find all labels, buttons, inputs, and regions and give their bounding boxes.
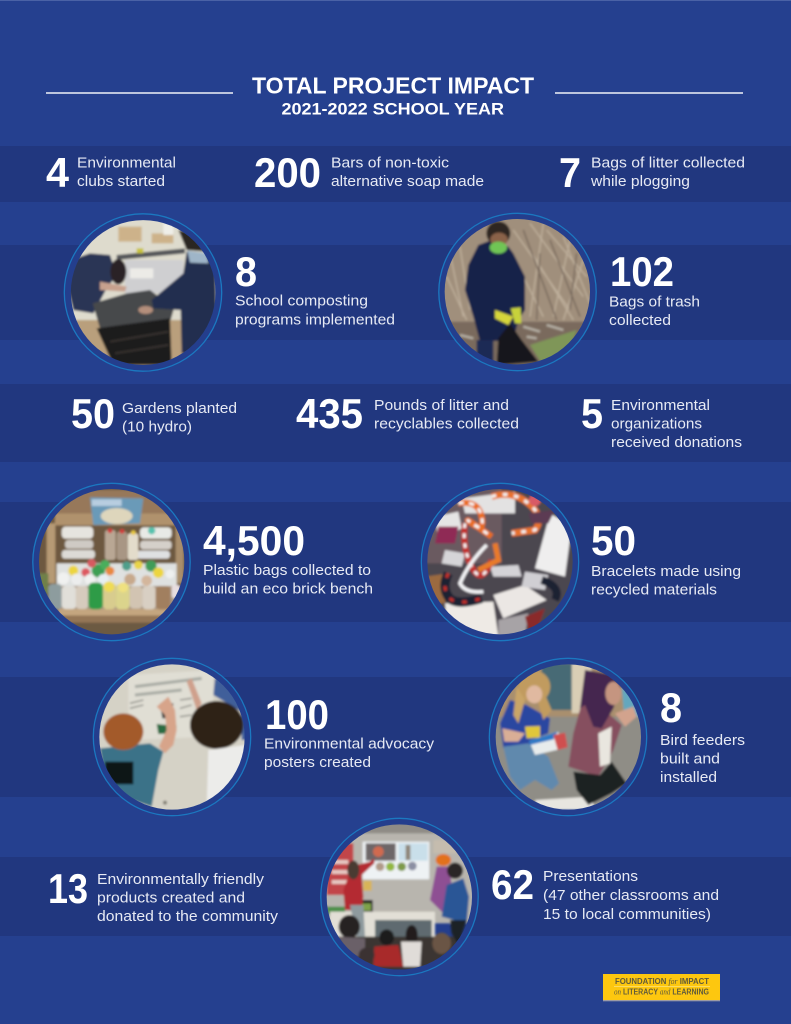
stat: 435 pounds of litter: 435 <box>296 390 363 437</box>
stat: 4,500 plastic bags: Plastic bags collected to <box>203 562 371 579</box>
stat: 7 bags of litter: 7 <box>559 149 581 196</box>
photo: eco brick bench <box>33 483 192 641</box>
stat: 50 gardens: (10 hydro) <box>122 418 192 436</box>
stat: 8 bird feeders <box>660 684 745 786</box>
stat: 4,500 plastic bags: 4,500 <box>203 517 305 564</box>
stat: 100 posters: 100 <box>265 691 329 738</box>
stat: 5 organizations: 5 <box>581 390 603 437</box>
stat: 13 products <box>48 865 279 925</box>
stat: 5 organizations <box>581 390 742 451</box>
logo: Foundation for Impact on Literacy and Learning <box>603 974 720 1001</box>
photo: students writing advocacy poster <box>93 658 252 816</box>
stat: 100 posters: Environmental advocacy <box>264 736 435 752</box>
title block <box>46 72 743 118</box>
stat: 7 bags of litter: Bags of litter collected <box>591 155 745 172</box>
photo: students building bird feeders <box>489 658 648 816</box>
stat: 13 products: Environmentally friendly <box>97 871 265 888</box>
stat: 62 presentations <box>491 861 719 923</box>
stat: 200 bars of soap: 200 <box>254 149 321 196</box>
stat: 50 bracelets <box>591 517 741 598</box>
stat: 62 presentations: 15 to local communities) <box>543 906 711 923</box>
stat: 13 products: products created and <box>97 890 245 906</box>
stat: 200 bars of soap <box>254 149 484 196</box>
stat: 5 organizations: Environmental <box>611 397 710 414</box>
band: row 2 <box>0 245 791 340</box>
stat: 435 pounds of litter: recyclables collected <box>374 416 519 432</box>
stat: 102 bags of trash: collected <box>609 312 671 329</box>
stat: 100 posters <box>264 691 435 771</box>
stat: 4,500 plastic bags: build an eco brick bench <box>203 580 373 598</box>
heading: TOTAL PROJECT IMPACT <box>252 72 535 98</box>
stat: 7 bags of litter <box>559 149 745 196</box>
stat: 102 bags of trash: Bags of trash <box>609 294 700 310</box>
band: row 1 <box>0 146 791 202</box>
stat: 5 organizations: received donations <box>611 434 742 451</box>
stat: 4 environmental clubs: Environmental <box>77 155 176 172</box>
band: row 3 <box>0 384 791 462</box>
photo: student collecting trash <box>439 213 597 372</box>
stat: 100 posters: posters created <box>264 754 371 771</box>
stat: 62 presentations: 62 <box>491 861 534 908</box>
stat: 4,500 plastic bags <box>203 517 373 598</box>
stat: 8 bird feeders: installed <box>660 769 717 786</box>
stat: 8 composting programs <box>235 248 395 328</box>
stat: 50 bracelets: recycled materials <box>591 582 717 598</box>
stat: 200 bars of soap: alternative soap made <box>331 173 484 190</box>
stat: 8 bird feeders: Bird feeders <box>660 732 745 749</box>
stat: 4 environmental clubs <box>46 149 176 196</box>
stat: 4 environmental clubs: clubs started <box>77 173 165 190</box>
band: row 6 <box>0 857 791 936</box>
stat: 62 presentations: Presentations <box>543 868 638 885</box>
band: row 5 <box>0 677 791 797</box>
stat: 50 gardens: Gardens planted <box>122 400 237 417</box>
stat: 102 bags of trash: 102 <box>610 248 674 295</box>
stat: 50 gardens: 50 <box>71 390 115 437</box>
stat: 8 composting programs: School composting <box>235 293 368 310</box>
stat: 50 gardens <box>71 390 237 437</box>
photo: students at compost bin <box>64 214 222 371</box>
stat: 8 composting programs: 8 <box>235 248 257 295</box>
stat: 7 bags of litter: while plogging <box>590 173 690 190</box>
stat: 200 bars of soap: Bars of non-toxic <box>331 155 450 172</box>
stat: 435 pounds of litter: Pounds of litter and <box>374 397 509 414</box>
logo: Foundation for Impact on Literacy and Learning: FOUNDATION for IMPACT <box>615 977 709 986</box>
stat: 5 organizations: organizations <box>611 416 702 432</box>
stat: 435 pounds of litter <box>296 390 519 437</box>
stat: 50 bracelets: Bracelets made using <box>591 563 741 580</box>
stat: 4 environmental clubs: 4 <box>46 149 70 196</box>
subheading: 2021-2022 SCHOOL YEAR <box>282 99 504 118</box>
stat: 13 products: donated to the community <box>97 908 279 925</box>
stat: 8 bird feeders: built and <box>660 750 720 768</box>
stat: 8 bird feeders: 8 <box>660 684 682 731</box>
band: row 4 <box>0 502 791 622</box>
stat: 102 bags of trash <box>609 248 700 329</box>
logo: Foundation for Impact on Literacy and Learning: on LITERACY and LEARNING <box>614 988 709 996</box>
photo: classroom presentation <box>321 818 478 976</box>
photo: recycled bracelets <box>421 483 579 641</box>
stat: 62 presentations: (47 other classrooms and <box>543 887 719 904</box>
stat: 8 composting programs: programs implemented <box>235 311 395 328</box>
stat: 50 bracelets: 50 <box>591 517 636 564</box>
stat: 13 products: 13 <box>48 865 88 912</box>
